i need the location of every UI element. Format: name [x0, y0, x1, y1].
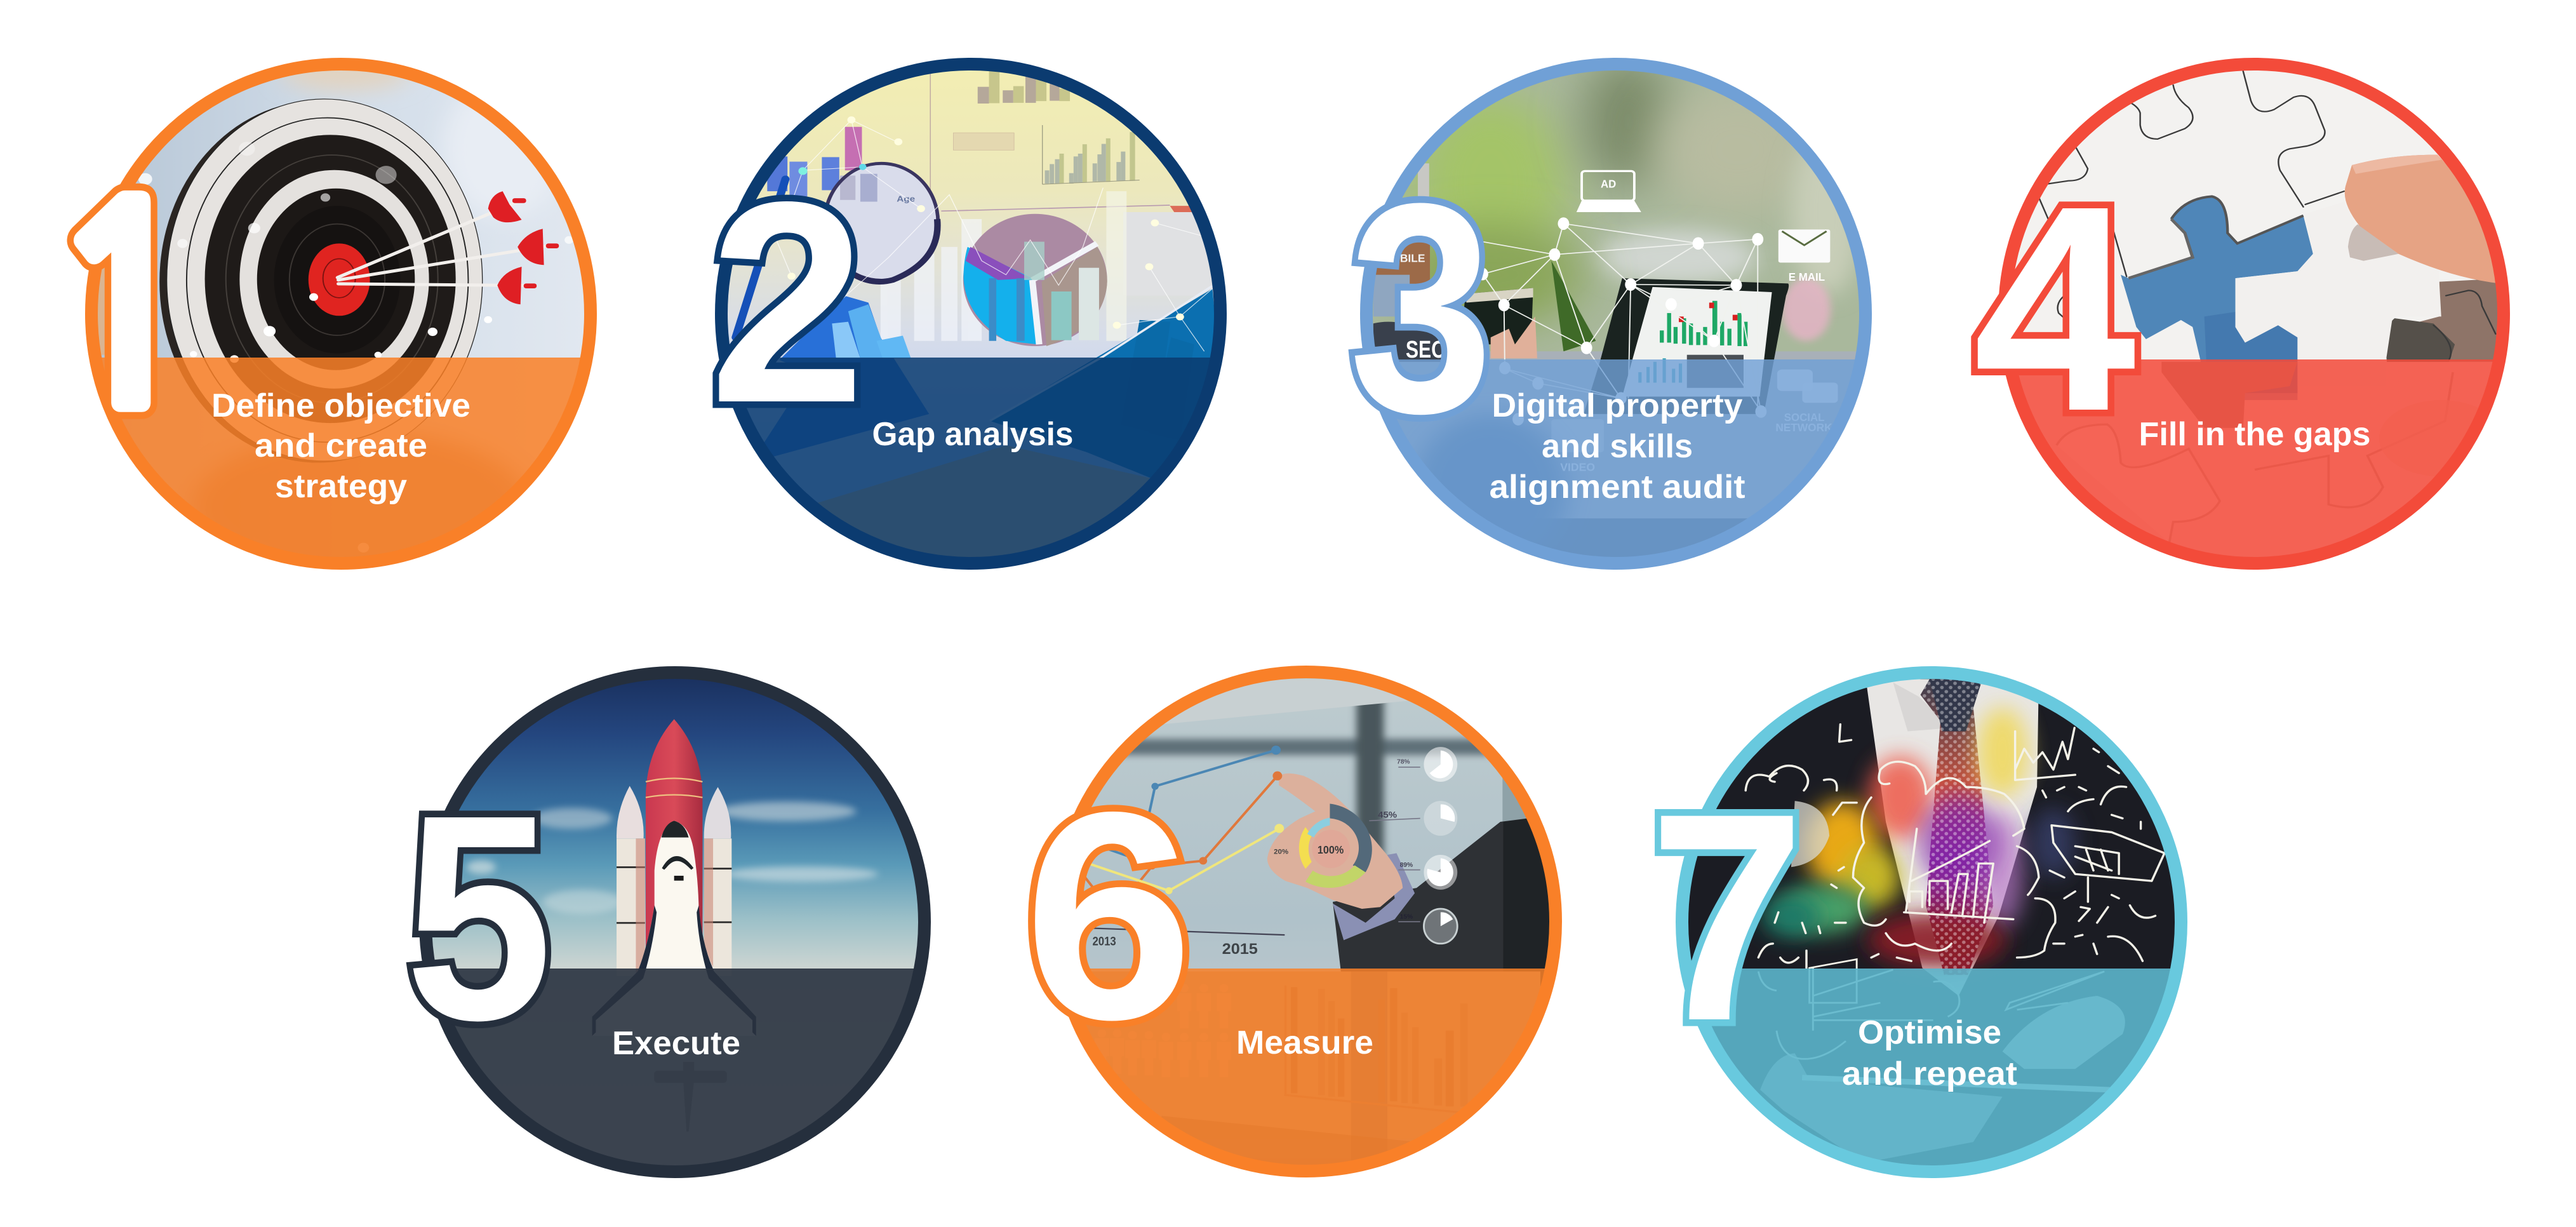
- number 2: 2: [709, 142, 865, 462]
- caption band: [1016, 969, 1587, 1197]
- axis: 2013: [1092, 935, 1116, 948]
- panel: step 1 define objective: [67, 58, 597, 570]
- left bars: [767, 127, 862, 196]
- network: [1483, 224, 1761, 412]
- caption band: [1333, 359, 1905, 588]
- axis: 2015: [1222, 941, 1258, 958]
- photo: suit with chalk sketches: [1638, 648, 2222, 1197]
- pie icons: 78%: [1397, 759, 1410, 765]
- pie chart: [963, 214, 1107, 346]
- pie icons: 15%: [1400, 914, 1413, 920]
- tablet with chart: [1584, 278, 1789, 414]
- caption: and repeat: [1842, 1056, 2017, 1092]
- ring: [1366, 64, 1865, 563]
- pie icons: 45%: [1378, 810, 1397, 820]
- number 5: 5: [405, 754, 552, 1082]
- ring: [2005, 64, 2504, 563]
- magnifier: Age: [897, 194, 915, 204]
- blue gap: [2121, 196, 2313, 393]
- caption: strategy: [275, 468, 407, 505]
- ring: [425, 673, 924, 1172]
- pie icons: [1369, 747, 1457, 944]
- ring: [1057, 672, 1556, 1171]
- hands on tablet: [1760, 996, 2125, 1163]
- caption band: [1651, 969, 2222, 1197]
- hand: [1267, 774, 1403, 909]
- faded sketches under caption: [1758, 959, 2104, 1059]
- panel: step 2 gap analysis: [712, 58, 1227, 570]
- ring: [721, 64, 1220, 563]
- photo: digital marketing network: [1373, 70, 1859, 557]
- caption: and skills: [1542, 428, 1693, 465]
- caption band: [1968, 359, 2540, 588]
- faded lower pieces: [2057, 362, 2453, 543]
- caption: Execute: [612, 1025, 740, 1062]
- panel: step 3 digital property audit: [1349, 58, 1872, 570]
- panel: step 4 fill in the gaps: [1956, 38, 2561, 588]
- pie sketch behind number: [1791, 801, 1829, 867]
- missing piece: [2235, 202, 2441, 386]
- photo: target with arrows: [98, 70, 584, 557]
- photo: charts and magnifier: [728, 70, 1214, 557]
- caption: alignment audit: [1490, 469, 1745, 506]
- panel: step 5 execute: [394, 648, 965, 1197]
- gauge: [1274, 804, 1372, 888]
- photo: hand touching charts: [1016, 648, 1587, 1197]
- panel: step 7 optimise and repeat: [1638, 648, 2222, 1197]
- icon: envelope: [1779, 229, 1830, 284]
- caption: [1842, 1014, 2017, 1092]
- number 4: 4: [1973, 145, 2138, 472]
- number 3: 3: [1349, 142, 1493, 475]
- ring: [91, 64, 591, 563]
- caption: [211, 387, 470, 505]
- axis: [1085, 928, 1285, 958]
- piece outlines: [2039, 71, 2495, 360]
- finger: [2345, 155, 2500, 283]
- chalk sketches: [1745, 725, 2165, 968]
- caption: Measure: [1236, 1024, 1373, 1061]
- icon: social network: NETWORK: [1775, 422, 1832, 434]
- caption: Digital property: [1492, 387, 1743, 424]
- icon: video: VIDEO: [1560, 462, 1595, 474]
- icon: social network: SOCIAL: [1784, 412, 1825, 424]
- caption: [1490, 387, 1745, 506]
- caption: Fill in the gaps: [2139, 416, 2371, 453]
- photo: jigsaw puzzle and finger: [1956, 38, 2561, 588]
- icon: video: [1551, 419, 1604, 474]
- phone in hand: [1460, 288, 1537, 358]
- pie icons: 89%: [1400, 862, 1413, 869]
- icon: rocket: [592, 719, 756, 1132]
- caption: Define objective: [211, 387, 470, 424]
- photo: digital marketing network: SEO: [1406, 335, 1446, 363]
- number 6: 6: [1024, 751, 1193, 1081]
- photo: space shuttle on sky: [394, 648, 965, 1197]
- caption: Gap analysis: [872, 416, 1073, 453]
- icon: social network: [1775, 370, 1838, 434]
- caption band: [747, 358, 1210, 557]
- icon: laptop AD: [1577, 171, 1641, 212]
- icon: laptop AD: AD: [1601, 178, 1616, 191]
- caption: and create: [255, 427, 427, 464]
- number 1: 1: [46, 174, 204, 447]
- shirt: [1865, 679, 2039, 996]
- panel: step 6 measure: [1016, 648, 1587, 1197]
- line chart: [1085, 750, 1279, 892]
- tie: [1921, 679, 1993, 975]
- faded bars and people: [1085, 972, 1540, 1194]
- gauge: 100%: [1318, 843, 1344, 856]
- network lines: [744, 120, 1212, 351]
- number 7: 7: [1649, 752, 1805, 1083]
- photo: digital marketing network: MOBILE: [1382, 253, 1425, 265]
- caption band: [102, 358, 580, 557]
- pen: [736, 179, 785, 337]
- caption band: [394, 969, 965, 1197]
- icon: envelope: E MAIL: [1789, 271, 1825, 284]
- gauge: 20%: [1274, 848, 1288, 855]
- magnifier: [825, 163, 938, 282]
- suit and sleeve: [1333, 815, 1555, 996]
- rainbow glow: [1762, 707, 2075, 968]
- number 1: 1: [46, 174, 204, 447]
- ring: [1682, 673, 2181, 1172]
- caption: Optimise: [1858, 1014, 2001, 1051]
